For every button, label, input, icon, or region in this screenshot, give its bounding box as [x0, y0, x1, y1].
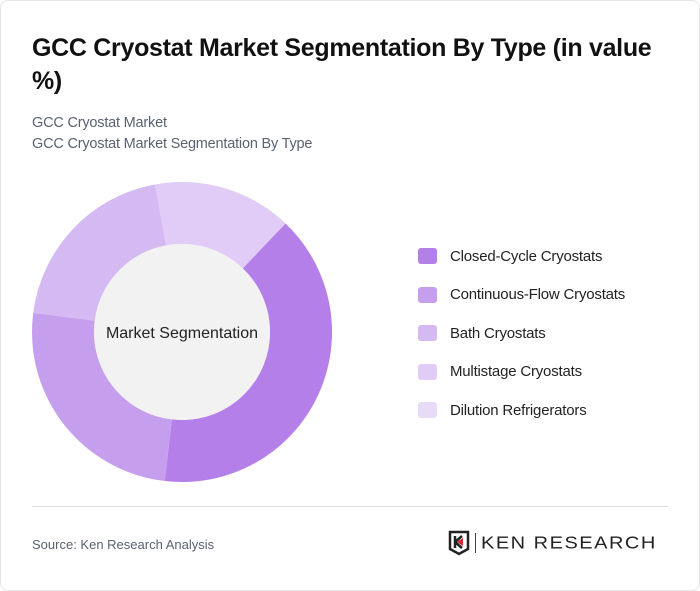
subtitle: GCC Cryostat Market Segmentation By Type	[32, 136, 312, 152]
source: Source: Ken Research Analysis	[32, 537, 214, 552]
title: GCC Cryostat Market Segmentation By Type (in value %)	[32, 34, 651, 95]
logo	[448, 530, 657, 556]
subtitle: GCC Cryostat Market	[32, 115, 167, 131]
legend: Multistage Cryostats	[450, 363, 582, 380]
legend: Dilution Refrigerators	[450, 402, 586, 419]
legend: Bath Cryostats	[450, 325, 546, 342]
logo: KEN RESEARCH	[481, 533, 657, 552]
donut chart	[32, 182, 332, 482]
legend: Closed-Cycle Cryostats	[450, 248, 602, 265]
donut chart: Market Segmentation	[106, 325, 258, 342]
legend	[418, 248, 625, 419]
subtitle	[32, 115, 312, 152]
legend: Continuous-Flow Cryostats	[450, 286, 625, 303]
